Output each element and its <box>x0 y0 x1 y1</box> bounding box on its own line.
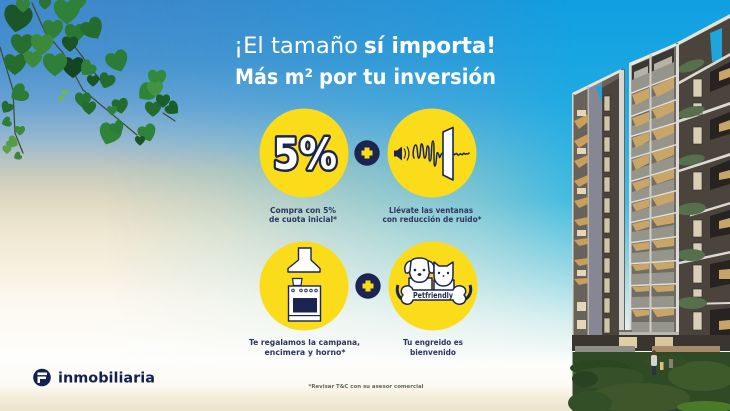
caption: kitchen: encimera y horno* <box>264 348 346 357</box>
icon: dog and cat on bone <box>397 258 471 304</box>
title: sí importa! <box>364 34 496 59</box>
caption: pets: Tu engreido es <box>403 338 463 347</box>
caption: 5%: de cuota inicial* <box>269 215 337 224</box>
caption: pets: bienvenido <box>410 348 457 357</box>
benefit: noise reduction windows <box>388 108 476 198</box>
left tower <box>572 69 625 346</box>
caption: 5% <box>269 206 337 224</box>
caption: windows <box>382 206 482 224</box>
caption: windows: Llévate las ventanas <box>389 206 473 215</box>
building <box>568 14 730 411</box>
logo: inmobiliaria <box>58 370 155 386</box>
benefit: 5% down payment <box>260 108 348 198</box>
people <box>651 350 673 375</box>
icon: window panel <box>443 128 453 180</box>
right block <box>675 14 730 350</box>
caption: pets <box>403 338 463 357</box>
title: por tu inversión <box>319 65 496 89</box>
icon: logo mark <box>33 369 51 386</box>
caption: windows: con reducción de ruido* <box>382 215 482 224</box>
caption: kitchen: Te regalamos la campana, <box>249 338 360 347</box>
icon: stove <box>288 278 320 321</box>
leafy branch <box>0 0 182 162</box>
centre bay <box>619 43 679 335</box>
benefit: kitchen appliances <box>260 242 348 330</box>
caption: kitchen <box>249 338 360 357</box>
ground floor <box>572 335 730 356</box>
logo <box>33 369 155 386</box>
icon: range hood <box>288 248 320 272</box>
footnote: *Revisar T&C con su asesor comercial <box>308 384 424 390</box>
garden <box>568 350 730 411</box>
caption: 5%: Compra con 5% <box>270 206 336 215</box>
plus icon top <box>354 140 380 166</box>
title <box>234 34 496 89</box>
icon: sound waves <box>394 141 469 166</box>
plus icon bottom <box>355 273 381 299</box>
pet friendly label: Petfriendly <box>413 291 453 300</box>
benefit: 5% down payment: 5% <box>273 130 337 180</box>
benefit: pet friendly <box>388 242 478 330</box>
title: ¡El tamaño <box>234 34 358 59</box>
title: Más m² <box>235 65 313 89</box>
